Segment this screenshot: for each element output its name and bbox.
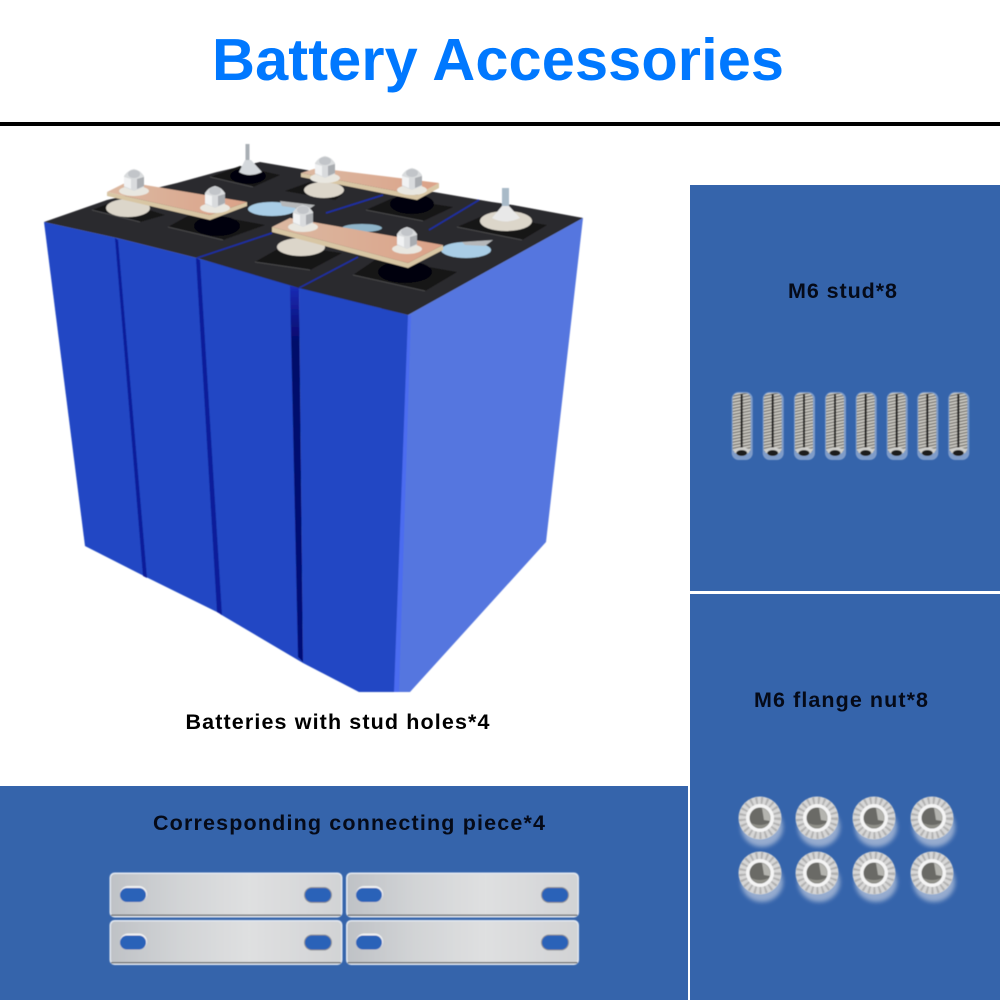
free studs [239,144,520,222]
label: connecting pieces: Corresponding connecting piece*4 [153,811,545,835]
label: M6 flange nut: M6 flange nut*8 [754,688,928,712]
illustration: four blue battery cells [44,144,583,692]
panel: M6 stud [690,185,1000,591]
cell dividers on top [197,195,479,288]
icon: four connecting plates [110,872,579,965]
title: Battery Accessories [212,26,784,93]
icon: eight flange nuts [738,796,955,902]
stickers [248,201,493,258]
nuts on connectors [119,156,427,254]
label: M6 stud: M6 stud*8 [788,279,897,303]
cell front faces [44,222,408,692]
gaskets [92,166,547,291]
panel: M6 flange nut [690,594,1000,1000]
insulators and seals [106,168,532,283]
label: batteries: Batteries with stud holes*4 [186,710,490,734]
battery top face [44,162,583,315]
panel: connecting pieces [0,786,688,1000]
battery right face [394,218,583,692]
icon: row of eight studs [732,392,969,460]
header rule [0,122,1000,126]
copper connector bars [107,168,443,268]
